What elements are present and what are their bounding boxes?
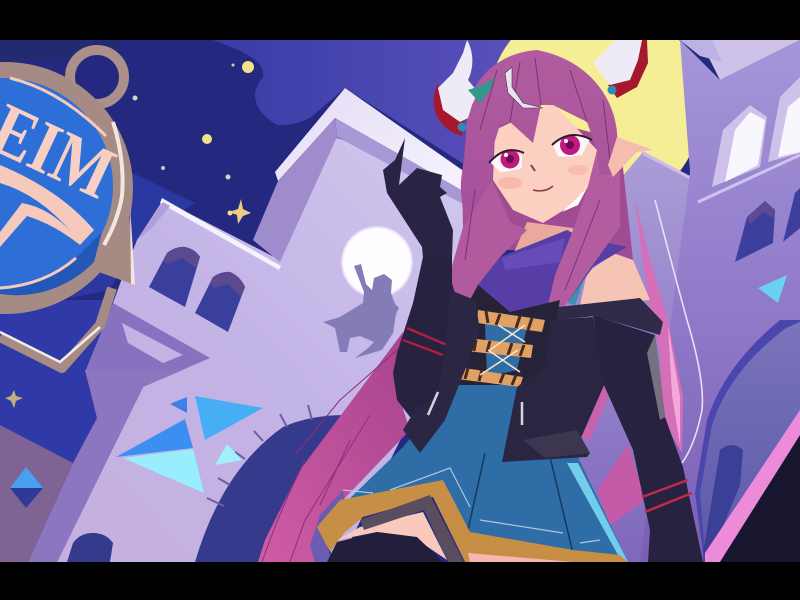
left arm red bands <box>403 328 447 355</box>
butterfly hair clip <box>468 77 495 103</box>
icon: lower sparkle star <box>5 390 23 408</box>
icon: blue triangle on wall <box>758 275 787 303</box>
badge ring <box>0 62 133 314</box>
shoulder <box>580 253 650 305</box>
badge pointer <box>100 218 135 285</box>
hair crown and fringe <box>461 50 620 227</box>
white cheek highlight <box>562 188 587 212</box>
building: right tower <box>560 40 800 562</box>
side wall <box>560 152 700 562</box>
hair shadow strand <box>310 490 345 562</box>
stars <box>5 61 254 408</box>
collar band <box>556 298 663 335</box>
badge swoosh <box>0 165 94 247</box>
left horn <box>434 40 478 136</box>
front hair left <box>450 180 527 330</box>
skirt trim <box>343 468 600 543</box>
face <box>493 103 597 223</box>
white roof edge <box>160 198 281 270</box>
skin below hem <box>468 553 573 562</box>
arch window <box>703 445 743 553</box>
blush <box>498 177 522 189</box>
thigh-high stocking <box>327 532 443 562</box>
small arch <box>67 533 113 562</box>
thin white hair line <box>655 200 702 463</box>
moon <box>496 40 689 175</box>
glowing moon with silhouette <box>323 226 413 358</box>
hair behind skirt right <box>580 377 610 440</box>
skirt fold lines <box>468 453 573 553</box>
right hair strand <box>635 200 683 453</box>
tower side shade <box>253 118 337 262</box>
sleeve highlight <box>647 335 665 420</box>
badge face <box>0 78 113 294</box>
building: right archway <box>695 320 800 562</box>
upper arched windows <box>712 77 800 187</box>
corset buckles <box>457 310 545 387</box>
eye: left <box>489 150 524 172</box>
right arm red bands <box>642 480 692 512</box>
hair strand lines <box>262 345 403 562</box>
arched windows <box>149 247 245 332</box>
under-cap shadow <box>335 118 465 205</box>
blue triangles on wall <box>116 396 263 493</box>
recessed shade <box>85 303 210 387</box>
right sleeve <box>593 315 703 562</box>
neck <box>510 222 575 262</box>
scarf <box>478 230 627 312</box>
jacket right <box>502 317 605 462</box>
hair back of head <box>462 100 633 260</box>
badge emblem <box>0 50 135 368</box>
jacket hem shade <box>523 430 590 458</box>
fringe strands <box>465 58 610 290</box>
ear <box>608 137 653 177</box>
skirt <box>343 385 628 562</box>
corset <box>455 285 560 385</box>
strap <box>360 495 464 562</box>
badge loop <box>70 50 124 104</box>
blue ornaments <box>458 122 466 132</box>
icon: sparkle star <box>229 199 251 224</box>
thigh skin <box>337 512 447 560</box>
left buttress <box>28 370 183 562</box>
lower arched windows <box>735 188 800 262</box>
eye: right <box>552 135 592 157</box>
lower archway <box>195 415 345 562</box>
right horn <box>593 40 648 98</box>
hand glove <box>383 138 453 258</box>
long hair left <box>258 332 410 562</box>
building: lower-left block <box>0 425 73 562</box>
corset lacing <box>480 325 525 375</box>
skirt hem gold <box>317 480 628 562</box>
white crescent hair ornament <box>505 67 543 108</box>
arch ticks <box>207 405 312 506</box>
main right wall <box>640 40 800 562</box>
mouth <box>533 186 553 191</box>
pink stripe <box>705 410 800 562</box>
front hair right <box>548 150 620 322</box>
tower roof cap <box>275 88 465 192</box>
jacket left <box>403 290 480 453</box>
badge hook <box>0 288 112 368</box>
nose <box>531 165 535 171</box>
skirt light stripe <box>567 463 628 562</box>
left sleeve arm <box>393 255 465 417</box>
jacket zippers <box>428 392 522 425</box>
building: central castle wall <box>28 88 470 562</box>
character: anime girl <box>258 40 703 562</box>
